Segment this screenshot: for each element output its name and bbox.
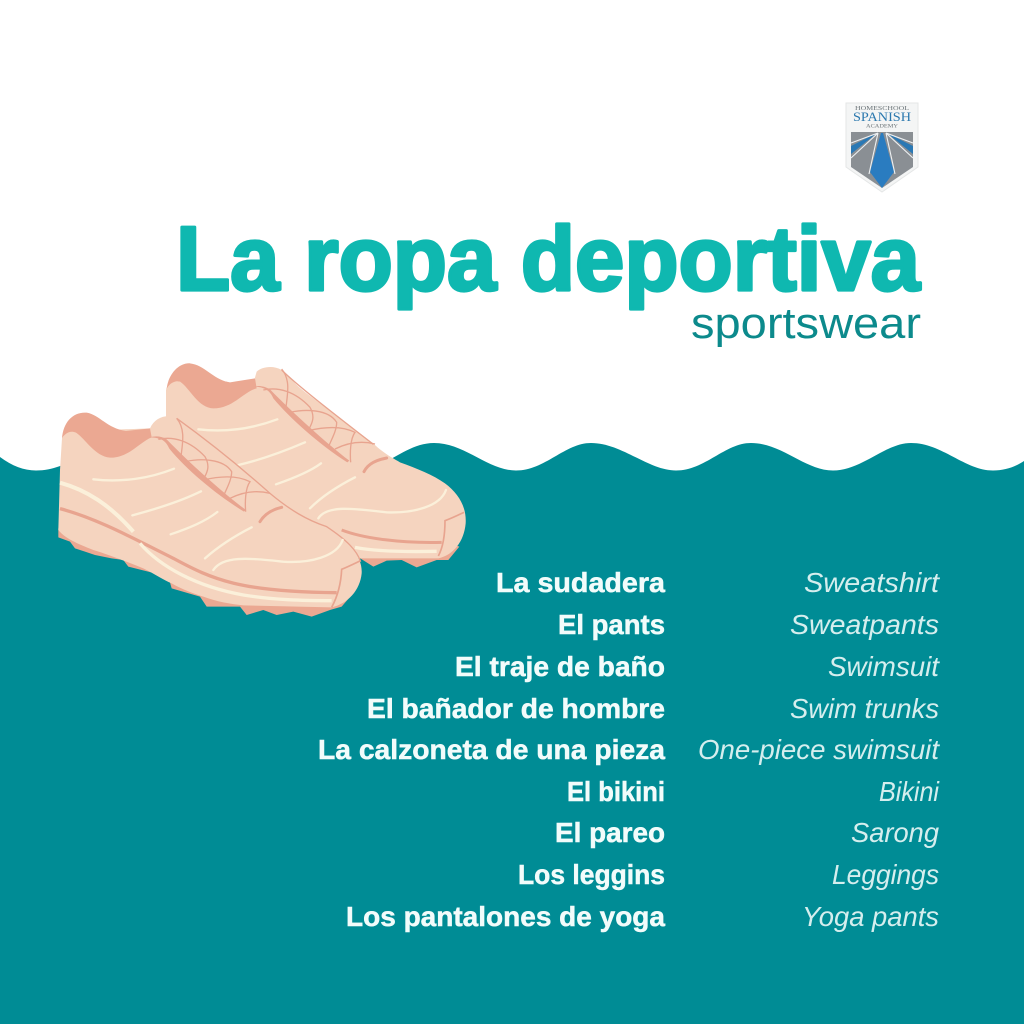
front shoe <box>58 413 362 617</box>
vocabulary list: English translations: Sarong <box>851 817 940 848</box>
logo: Homeschool Spanish Academy shield <box>846 103 918 192</box>
vocabulary list: Spanish terms: La sudadera <box>496 567 666 598</box>
vocabulary list: English translations: One-piece swimsuit <box>698 734 940 765</box>
vocabulary list: Spanish terms: La calzoneta de una pieza <box>318 734 666 765</box>
vocabulary list: Spanish terms: El traje de baño <box>455 651 665 682</box>
vocabulary list: Spanish terms <box>318 567 666 932</box>
vocabulary list: English translations: Leggings <box>832 859 939 890</box>
vocabulary list: Spanish terms: Los leggins <box>518 859 665 890</box>
vocabulary list: Spanish terms: El bikini <box>567 776 665 807</box>
subtitle: sportswear <box>691 299 921 348</box>
vocabulary list: English translations: Sweatshirt <box>804 567 940 598</box>
logo: Homeschool Spanish Academy shield: HOMESCHOOL <box>855 106 909 112</box>
vocabulary list: English translations: Sweatpants <box>790 609 939 640</box>
vocabulary list: Spanish terms: Los pantalones de yoga <box>346 901 666 932</box>
logo: Homeschool Spanish Academy shield: SPANISH <box>853 110 911 124</box>
vocabulary list: Spanish terms: El pareo <box>555 817 665 848</box>
vocabulary list: English translations <box>698 567 940 932</box>
back shoe <box>166 363 466 567</box>
vocabulary list: English translations: Bikini <box>879 776 940 807</box>
logo: Homeschool Spanish Academy shield: ACADEMY <box>866 124 898 130</box>
illustration: pair of sneakers <box>58 363 466 617</box>
title: La ropa deportiva <box>176 209 921 310</box>
vocabulary list: English translations: Swim trunks <box>790 693 939 724</box>
background: teal wave panel <box>0 443 1024 1024</box>
vocabulary list: Spanish terms: El pants <box>558 609 665 640</box>
vocabulary list: Spanish terms: El bañador de hombre <box>367 693 665 724</box>
vocabulary list: English translations: Yoga pants <box>802 901 939 932</box>
vocabulary list: English translations: Swimsuit <box>828 651 940 682</box>
